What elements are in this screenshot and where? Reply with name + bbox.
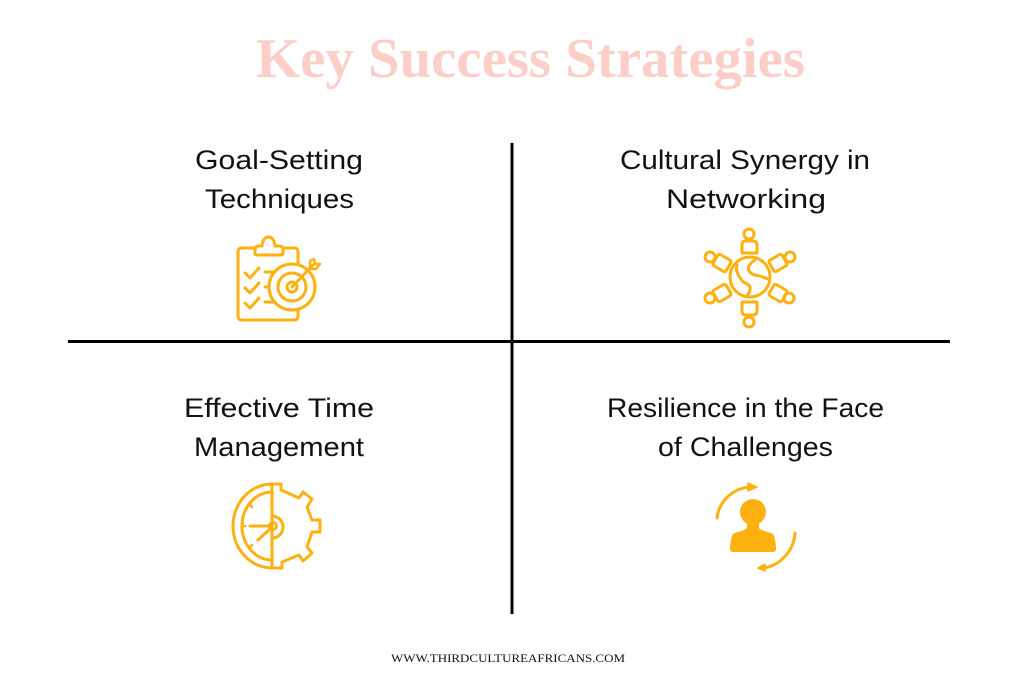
- heading: effective time management: Management: [194, 432, 365, 462]
- panel: resilience in the face of challenges: [607, 393, 884, 571]
- heading: cultural synergy in networking: Networking: [666, 184, 826, 214]
- heading: goal-setting techniques: Techniques: [205, 184, 354, 214]
- heading: goal-setting techniques: [195, 145, 363, 214]
- horizontal divider: [68, 340, 950, 343]
- panel: goal-setting techniques: [195, 145, 363, 320]
- heading: resilience in the face of challenges: of Challenges: [658, 432, 833, 462]
- heading: goal-setting techniques: Goal-Setting: [195, 145, 363, 175]
- heading: resilience in the face of challenges: Resilience in the Face: [607, 393, 884, 423]
- panel: effective time management: [184, 393, 374, 568]
- heading: cultural synergy in networking: [620, 145, 870, 214]
- vertical divider: [510, 143, 514, 614]
- panel: cultural synergy in networking: [620, 145, 870, 327]
- heading: resilience in the face of challenges: [607, 393, 884, 462]
- icon: people around globe: [705, 229, 795, 327]
- icon: clipboard with target: [238, 237, 320, 320]
- icon: person with circular arrows: [717, 483, 795, 571]
- heading: effective time management: [184, 393, 374, 462]
- title: Key Success Strategies: [256, 28, 805, 90]
- heading: cultural synergy in networking: Cultural Synergy in: [620, 145, 870, 175]
- heading: effective time management: Effective Time: [184, 393, 374, 423]
- icon: half clock half gear: [233, 484, 320, 568]
- footer website: WWW.THIRDCULTUREAFRICANS.COM: [391, 651, 625, 665]
